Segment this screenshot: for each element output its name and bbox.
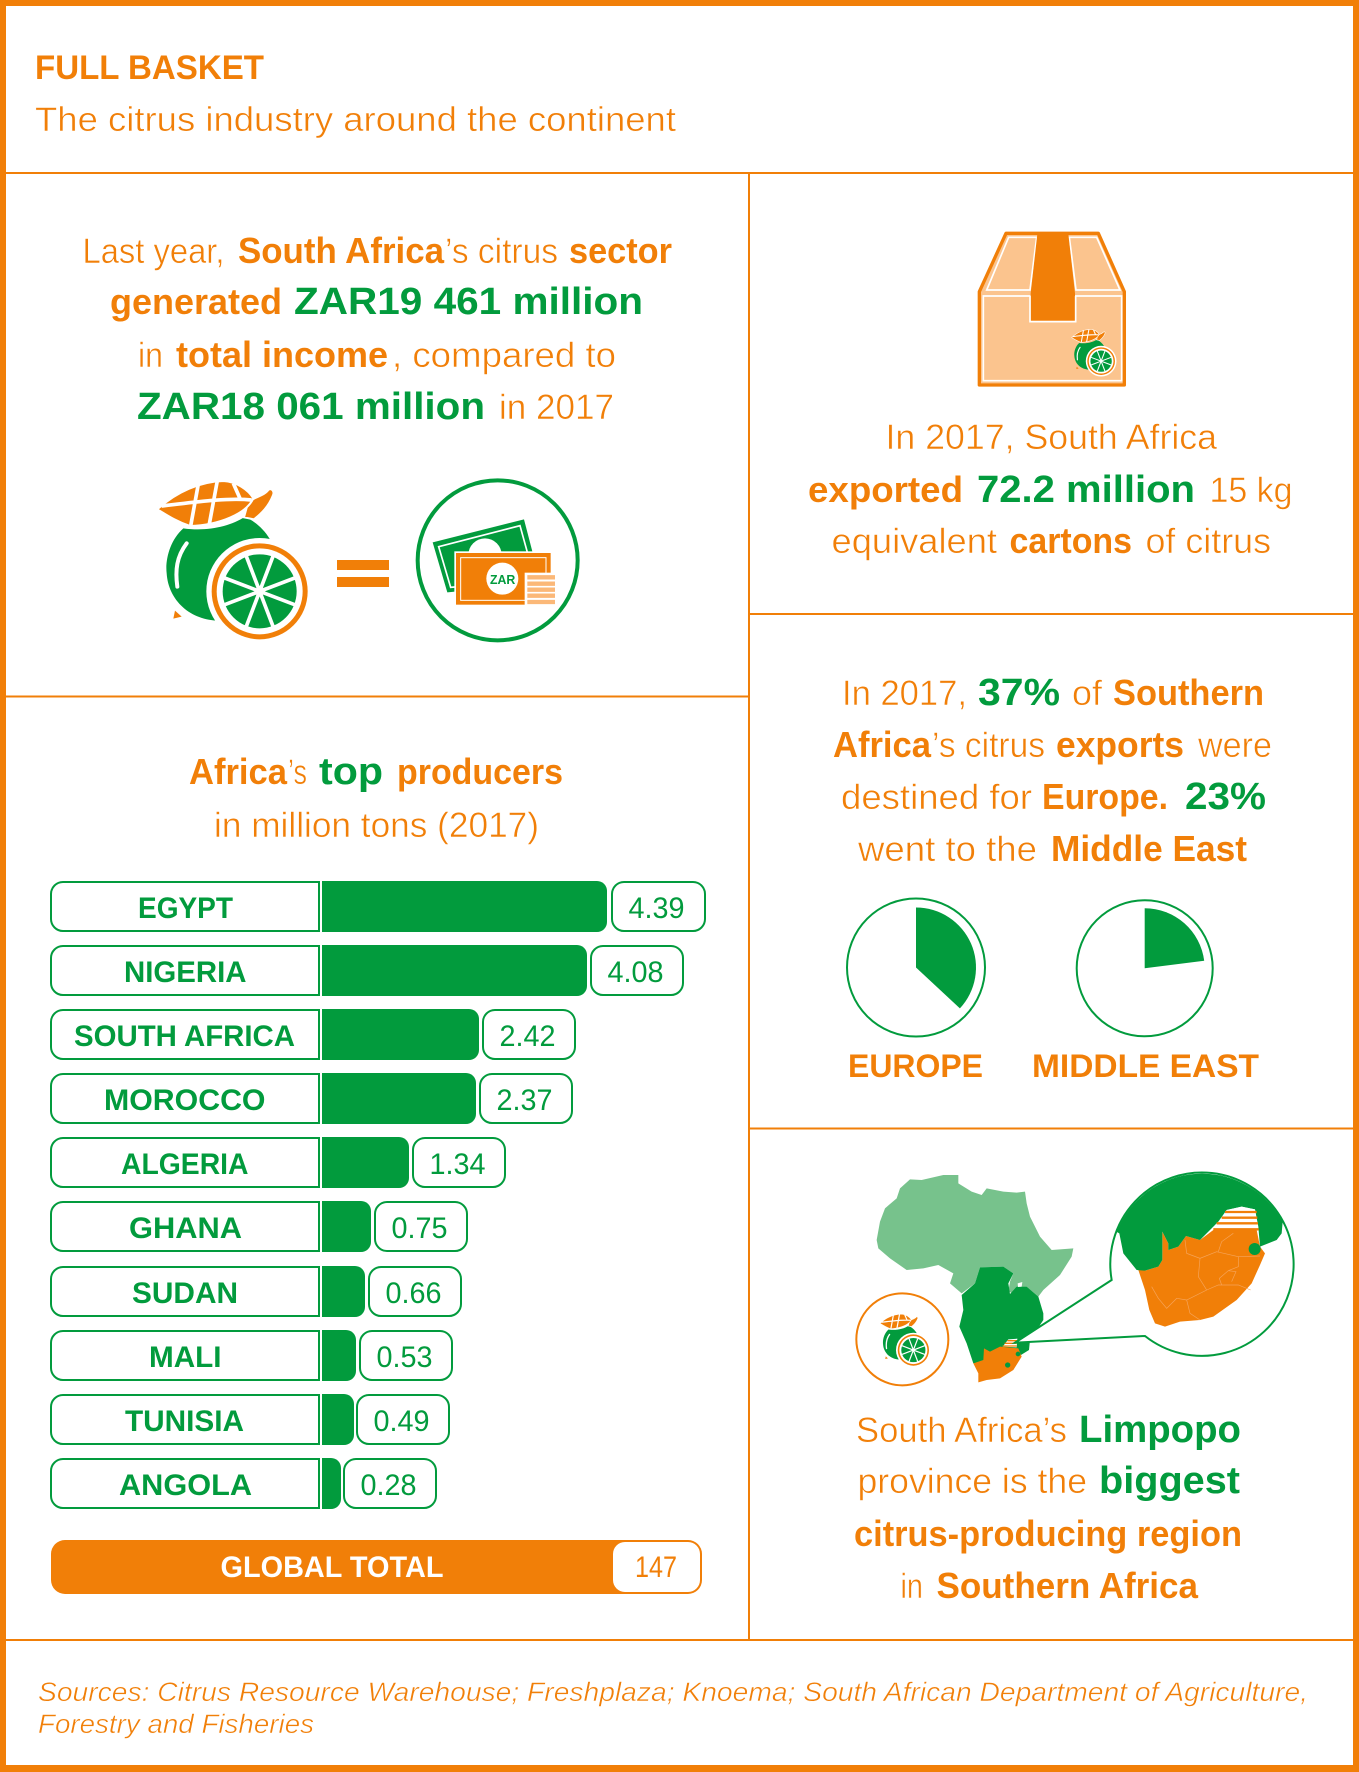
bar: Ghana: GHANA (129, 1212, 242, 1245)
icon: ZAR bank notes in circle: ZAR (490, 572, 516, 587)
inset: enlarged South Africa (1117, 1174, 1282, 1327)
text block: destinations statement: were (1197, 726, 1272, 765)
text block: destinations statement: exports (1056, 724, 1184, 765)
bar: Sudan (51, 1266, 461, 1317)
text block: destinations statement: ’s citrus (932, 726, 1045, 765)
bar: Morocco: 2.37 (496, 1084, 552, 1117)
title: The citrus industry around the continent (35, 101, 677, 139)
text block: destinations statement: 37% (978, 672, 1060, 714)
bar: Algeria: 1.34 (430, 1148, 486, 1181)
bar: Angola (51, 1458, 436, 1509)
panel: income (82, 230, 672, 645)
map: Lesotho and Eswatini (1005, 1352, 1020, 1368)
text block: income statement: Last year, (82, 232, 224, 271)
panel: export destinations (833, 672, 1272, 1084)
text block: income statement: in 2017 (499, 388, 614, 427)
bar: Egypt (51, 881, 705, 932)
text block: Limpopo statement: citrus-producing region (854, 1513, 1242, 1554)
bar: Egypt: EGYPT (138, 892, 233, 925)
bar: Morocco (51, 1073, 572, 1124)
pie chart: Middle East 23% (1032, 900, 1259, 1084)
text block: Limpopo statement: South Africa’s (856, 1411, 1067, 1450)
footer: sources (38, 1677, 1308, 1739)
heading: top producers: ’s (288, 753, 307, 792)
text block: Limpopo statement: Limpopo (1079, 1409, 1241, 1451)
text block: exports statement: 72.2 million (977, 469, 1195, 511)
bar: Mali: MALI (149, 1341, 222, 1374)
text block: exports statement: cartons (1010, 520, 1132, 561)
icon: carton with citrus (979, 233, 1124, 385)
text block: income statement: total income (176, 334, 388, 375)
bar: Angola: 0.28 (360, 1469, 416, 1502)
bar: Tunisia (51, 1394, 449, 1445)
map: Lake Victoria gap (1018, 1282, 1022, 1287)
bar: Algeria: ALGERIA (121, 1148, 248, 1181)
global total bar: 147 (635, 1551, 677, 1584)
text block: income statement: ZAR18 061 million (137, 386, 485, 428)
title: FULL BASKET (35, 49, 264, 87)
pie chart: Middle East 23%: MIDDLE EAST (1032, 1048, 1259, 1084)
heading: top producers (189, 751, 563, 845)
pie chart: Europe 37% (847, 898, 985, 1084)
text block: Limpopo statement: province is the (858, 1462, 1087, 1501)
text block: destinations statement: In 2017, (842, 674, 967, 713)
bar: Ghana (51, 1201, 467, 1252)
text block: exports statement: In 2017, South Africa (886, 418, 1218, 457)
bar: Mali (51, 1330, 452, 1381)
text block: exports statement: of citrus (1146, 522, 1271, 561)
text block: Limpopo statement: Southern Africa (936, 1565, 1199, 1606)
icon: citrus in circle (856, 1293, 948, 1385)
text block: destinations statement: Middle East (1051, 828, 1247, 869)
title (35, 49, 677, 139)
bar: Angola: ANGOLA (119, 1469, 252, 1502)
icon: equals sign (337, 560, 389, 587)
bar: South Africa: 2.42 (500, 1020, 556, 1053)
bar: Egypt: 4.39 (628, 892, 684, 925)
icon: citrus fruit (157, 481, 313, 645)
map: Africa with inset of South Africa (856, 1167, 1297, 1385)
panel: Limpopo map (854, 1167, 1297, 1606)
text block: income statement: sector (569, 230, 672, 271)
text block: destinations statement: went to the (857, 830, 1037, 869)
heading: top producers: in million tons (2017) (214, 806, 539, 845)
text block: Limpopo statement (854, 1409, 1242, 1606)
bar: Algeria (51, 1137, 505, 1188)
map: northern Africa (877, 1175, 1073, 1297)
bar: Nigeria: NIGERIA (124, 956, 246, 989)
bar: Sudan: SUDAN (132, 1277, 238, 1310)
footer: sources: Sources: Citrus Resource Warehouse; Freshplaza; Knoema; South African Department of Agriculture, (38, 1677, 1308, 1707)
text block: income statement: , compared to (392, 336, 616, 375)
map: southern Africa (959, 1267, 1043, 1363)
inset: callout circle (1015, 1173, 1294, 1356)
text block: destinations statement (833, 672, 1272, 869)
bar: South Africa (51, 1009, 575, 1060)
text block: income statement: South Africa (238, 230, 445, 271)
text block: destinations statement: of (1072, 674, 1102, 713)
heading: top producers: producers (397, 751, 563, 792)
panel: exports carton (808, 233, 1292, 561)
global total bar (51, 1540, 702, 1594)
text block: exports statement (808, 418, 1292, 561)
bar: Morocco: MOROCCO (104, 1084, 266, 1117)
bar: Mali: 0.53 (376, 1341, 432, 1374)
heading: top producers: top (319, 751, 383, 793)
text block: Limpopo statement: in (900, 1567, 923, 1606)
text block: destinations statement: Africa (833, 724, 932, 765)
text block: exports statement: exported (808, 469, 963, 510)
text block: destinations statement: 23% (1185, 776, 1266, 818)
bar chart: producers (51, 881, 705, 1509)
text block: income statement: ’s citrus (445, 232, 558, 271)
text block: destinations statement: destined for (841, 778, 1032, 817)
text block: exports statement: 15 kg (1210, 471, 1292, 510)
text block: income statement: generated (110, 281, 282, 322)
text block: income statement: ZAR19 461 million (294, 281, 643, 323)
bar: Tunisia: 0.49 (374, 1405, 430, 1438)
text block: income statement: in (138, 336, 163, 375)
bar: Nigeria: 4.08 (608, 956, 664, 989)
text block: income statement (82, 230, 672, 428)
text block: destinations statement: Southern (1113, 672, 1264, 713)
bar: Sudan: 0.66 (386, 1277, 442, 1310)
bar: South Africa: SOUTH AFRICA (74, 1020, 295, 1053)
bar: Ghana: 0.75 (392, 1212, 448, 1245)
global total bar: GLOBAL TOTAL (220, 1551, 444, 1584)
text block: exports statement: equivalent (832, 522, 997, 561)
text block: Limpopo statement: biggest (1099, 1460, 1240, 1502)
icon: ZAR bank notes in circle (418, 480, 578, 640)
panel: top producers (51, 751, 705, 1594)
map: Limpopo highlight (1003, 1339, 1017, 1347)
map: South Africa (973, 1347, 1022, 1382)
pie chart: Europe 37%: EUROPE (848, 1048, 983, 1084)
bar: Nigeria (51, 945, 683, 996)
footer: sources: Forestry and Fisheries (38, 1709, 314, 1739)
heading: top producers: Africa (189, 751, 288, 792)
text block: destinations statement: Europe. (1042, 776, 1168, 817)
bar: Tunisia: TUNISIA (125, 1405, 244, 1438)
